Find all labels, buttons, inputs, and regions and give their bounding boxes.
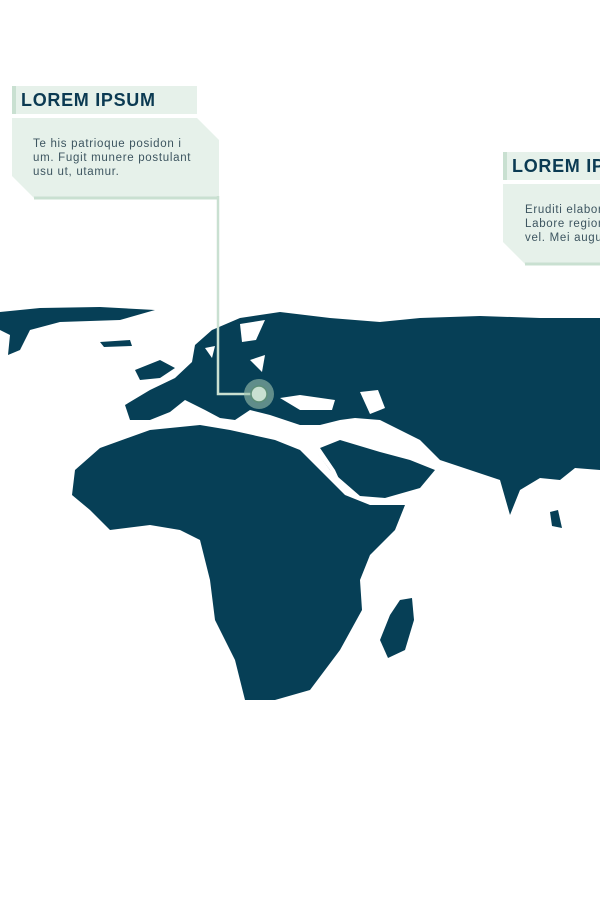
text: Te his patrioque posidon i (33, 138, 182, 150)
heading (12, 86, 197, 114)
heading (503, 152, 600, 180)
Arabia (315, 440, 435, 498)
text: usu ut, utamur. (33, 166, 120, 178)
Europe and Asia (125, 312, 600, 515)
text (33, 138, 191, 178)
panel: right callout (503, 152, 600, 266)
text: um. Fugit munere postulant (33, 152, 191, 164)
body box (503, 184, 600, 266)
panel: left callout (12, 86, 219, 200)
Madagascar (380, 598, 414, 658)
body box (12, 118, 219, 200)
Africa (72, 425, 405, 700)
heading: LOREM IPSUM (21, 90, 156, 110)
text (525, 204, 600, 244)
Greenland (0, 307, 155, 355)
